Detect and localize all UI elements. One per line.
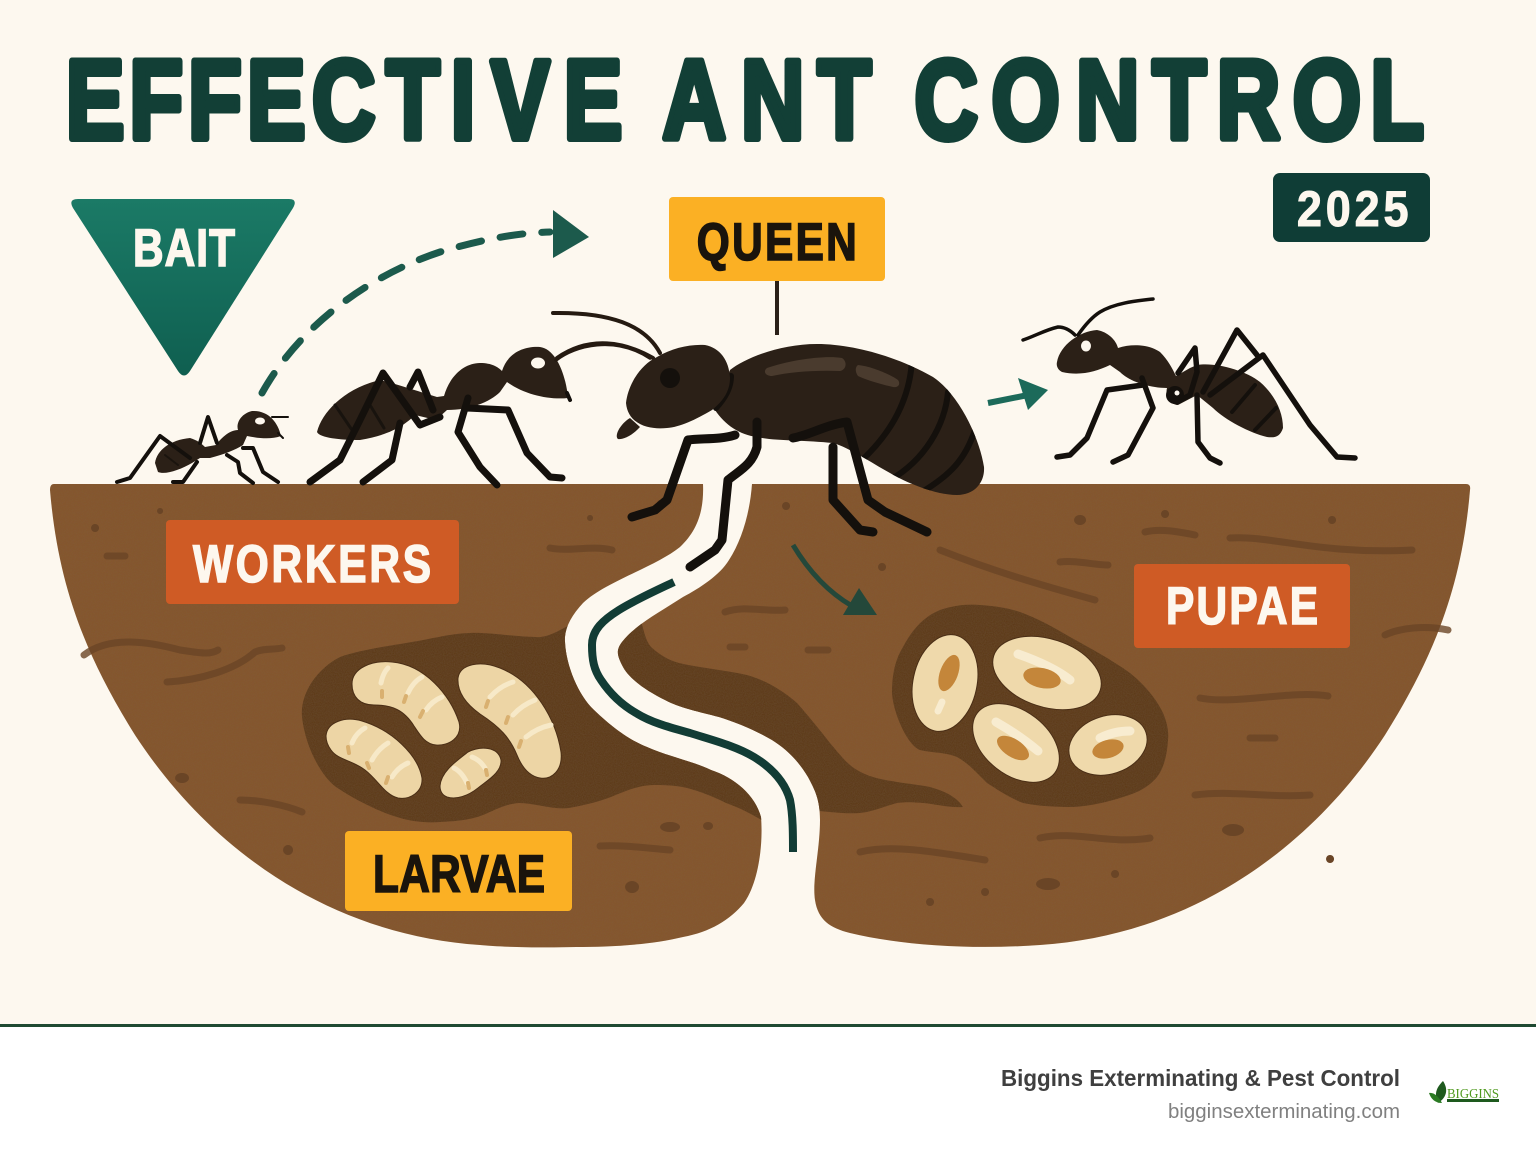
label: workers: WORKERS <box>193 536 431 594</box>
label: larvae <box>345 831 572 911</box>
bait triangle label <box>71 199 295 376</box>
label: pupae <box>1134 564 1350 648</box>
footer logo <box>1429 1081 1499 1103</box>
larva: lower left <box>326 719 422 798</box>
year badge <box>1273 173 1430 242</box>
pupa 1 <box>904 628 986 738</box>
label: workers <box>166 520 459 604</box>
label: queen <box>669 197 885 281</box>
pupa 3 <box>958 688 1074 798</box>
title: EFFECTIVE ANT CONTROL <box>66 38 1424 163</box>
arrow: queen down to pupae <box>793 545 877 615</box>
bait triangle label: BAIT <box>133 220 235 278</box>
label: larvae: LARVAE <box>373 846 545 904</box>
worker ant: medium <box>310 344 650 485</box>
footer logo: BIGGINS <box>1447 1087 1499 1102</box>
pupae <box>904 623 1155 798</box>
queen ant <box>553 313 984 567</box>
footer website: bigginsexterminating.com <box>1168 1101 1400 1123</box>
year badge: 2025 <box>1297 182 1408 238</box>
pupa 2 <box>983 623 1111 723</box>
pupae chamber <box>892 605 1168 807</box>
footer company name: Biggins Exterminating & Pest Control <box>1001 1065 1400 1091</box>
soil cross-section with tunnel <box>50 484 1470 947</box>
tunnel trail line <box>592 582 793 852</box>
queen leader line <box>775 280 779 335</box>
pupa 4 <box>1061 705 1155 785</box>
dark soil band right of tunnel <box>600 618 963 813</box>
label: pupae: PUPAE <box>1166 578 1318 636</box>
dashed arrow from bait to queen <box>262 210 589 393</box>
larva: top right <box>458 664 561 778</box>
arrow: queen to right worker <box>988 378 1048 410</box>
soil texture marks <box>84 500 1448 906</box>
larvae chamber <box>302 622 780 825</box>
worker ant: right <box>1023 299 1355 463</box>
larva: small <box>440 748 501 798</box>
footer <box>0 1024 1536 1154</box>
larva: top left <box>352 662 460 745</box>
larvae <box>326 662 561 798</box>
worker ant: small <box>117 411 288 483</box>
label: queen: QUEEN <box>697 214 857 272</box>
